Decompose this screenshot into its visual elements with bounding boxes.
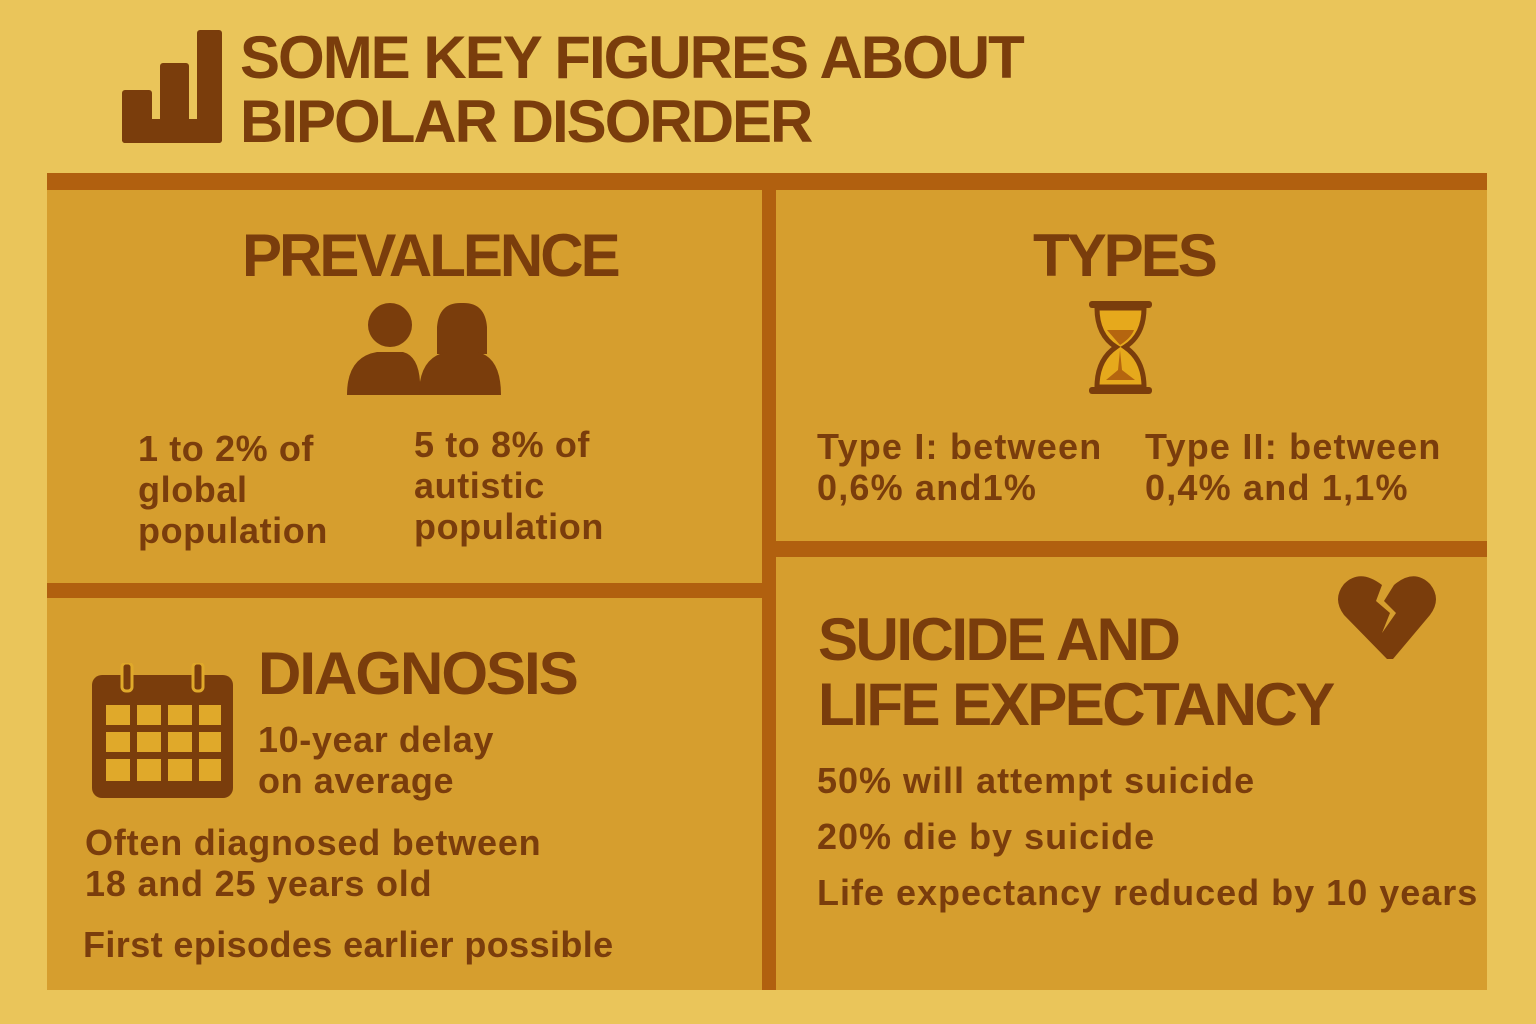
text: suicide stats: 20% die by suicide (817, 816, 1155, 857)
heading: diagnosis: DIAGNOSIS (258, 640, 577, 707)
text: suicide stats (817, 760, 1478, 913)
title: BIPOLAR DISORDER (240, 88, 811, 155)
panel: diagnosis (47, 598, 762, 990)
icon: broken heart (1338, 576, 1436, 659)
text: autistic: 5 to 8% of (414, 424, 590, 465)
text: global: population (138, 510, 328, 551)
text: global: global (138, 469, 248, 510)
text: type I (817, 426, 1102, 508)
text: type II (1145, 426, 1442, 508)
text: global: 1 to 2% of (138, 428, 314, 469)
text: autistic: autistic (414, 465, 545, 506)
text: age: Often diagnosed between (85, 822, 541, 863)
text: age (85, 822, 541, 904)
text: autistic: population (414, 506, 604, 547)
text: suicide stats: 50% will attempt suicide (817, 760, 1255, 801)
icon: hourglass (1089, 301, 1152, 394)
text: global (138, 428, 328, 551)
text: type I: Type I: between (817, 426, 1102, 467)
heading: prevalence: PREVALENCE (242, 222, 618, 289)
text: age: 18 and 25 years old (85, 863, 432, 904)
title (240, 24, 1024, 155)
title: SOME KEY FIGURES ABOUT (240, 24, 1023, 91)
panel: suicide (776, 557, 1487, 990)
heading: suicide: SUICIDE AND (818, 606, 1178, 673)
heading: types: TYPES (1033, 222, 1215, 289)
heading: suicide: LIFE EXPECTANCY (818, 671, 1333, 738)
text: type II: 0,4% and 1,1% (1145, 467, 1409, 508)
text: delay (258, 719, 494, 801)
text: delay: on average (258, 760, 454, 801)
text: suicide stats: Life expectancy reduced by 10 years (817, 872, 1478, 913)
text: autistic (414, 424, 604, 547)
icon: calendar (92, 663, 233, 798)
text: type II: Type II: between (1145, 426, 1442, 467)
heading: suicide (818, 606, 1334, 738)
panel: prevalence (47, 190, 762, 583)
panel: types (776, 190, 1487, 541)
text: delay: 10-year delay (258, 719, 494, 760)
icon: people (347, 303, 501, 395)
text: type I: 0,6% and1% (817, 467, 1037, 508)
text: first episodes: First episodes earlier possible (83, 924, 614, 965)
icon: bar chart (122, 30, 222, 143)
frame (47, 173, 1487, 990)
